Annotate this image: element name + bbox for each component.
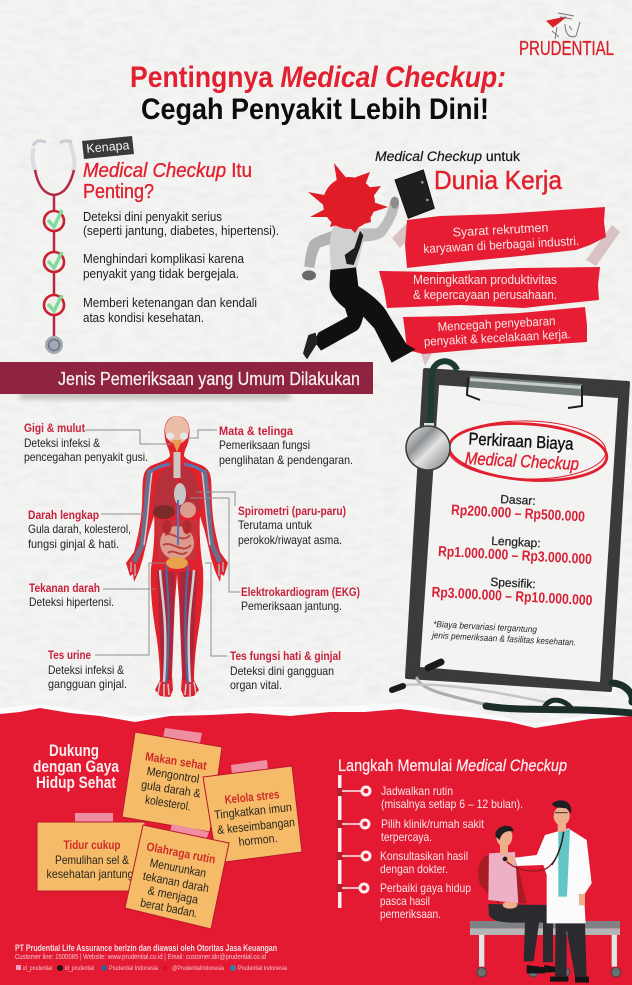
note: olahraga rutin: Menurunkan <box>149 856 207 880</box>
steps text: Jadwalkan rutin <box>381 784 453 798</box>
list text <box>83 210 279 325</box>
tape strips <box>392 222 620 366</box>
cost: spesifik <box>431 575 593 609</box>
note: makan sehat: Makan sehat <box>144 749 208 773</box>
footer <box>15 943 287 972</box>
social media row: @PrudentialIndonesia <box>172 965 224 972</box>
label: darah lengkap <box>28 508 131 551</box>
doctor <box>503 800 592 983</box>
title line 2: Cegah Penyakit Lebih Dini! <box>141 93 489 126</box>
company statement: PT Prudential Life Assurance berizin dan diawasi oleh Otoritas Jasa Keuangan <box>15 943 277 953</box>
cost: spesifik: Rp3.000.000 – Rp10.000.000 <box>431 585 593 609</box>
banner: jenis pemeriksaan: Jenis Pemeriksaan yang Umum Dilakukan <box>58 368 360 389</box>
red hand-drawn ellipse <box>447 419 609 485</box>
cost: dasar: Dasar: <box>500 492 536 508</box>
label: tes urine: Deteksi infeksi & <box>48 663 124 677</box>
spine vessels <box>177 500 179 545</box>
cost heading <box>465 429 580 474</box>
label: tes urine: gangguan ginjal. <box>48 677 127 691</box>
list text: atas kondisi kesehatan. <box>83 311 204 325</box>
kidneys <box>162 520 192 534</box>
note: kelola stres: Kelola stres <box>224 787 280 807</box>
running businessman <box>302 170 434 363</box>
label: tekanan darah: Tekanan darah <box>29 581 100 595</box>
ribbon 3: penyakit & kecelakaan kerja. <box>423 327 571 349</box>
label: spirometri <box>238 504 346 547</box>
label: darah lengkap: Darah lengkap <box>28 508 99 522</box>
steps text: Konsultasikan hasil <box>380 849 468 863</box>
cost: lengkap <box>438 534 592 568</box>
note: makan sehat <box>122 728 222 832</box>
lifestyle heading: Hidup Sehat <box>36 773 116 792</box>
note: tidur cukup: Pemulihan sel & <box>55 853 129 867</box>
note: makan sehat: kolesterol. <box>144 792 192 814</box>
anatomy labels <box>24 421 360 692</box>
label: mata & telinga: Pemeriksaan fungsi <box>219 438 310 452</box>
trousers <box>314 267 416 363</box>
note: tidur cukup: kesehatan jantung <box>46 867 134 881</box>
label: mata & telinga: Mata & telinga <box>219 424 293 438</box>
icon: stethoscope timeline <box>33 141 74 354</box>
list text: Menghindari komplikasi karena <box>83 252 244 266</box>
steps text: (misalnya setiap 6 – 12 bulan). <box>381 797 523 811</box>
social media row <box>16 965 287 972</box>
steps text: pemeriksaan. <box>380 907 441 921</box>
steps text <box>380 784 523 921</box>
ribbon 3 <box>403 307 587 354</box>
pelvis <box>166 557 188 569</box>
cost: lengkap: Lengkap: <box>491 534 541 550</box>
neck <box>174 452 180 478</box>
fist <box>302 270 316 280</box>
ribbon 1: Syarat rekrutmen <box>452 221 549 240</box>
note: kelola stres: hormon. <box>238 831 278 849</box>
heading large: Dunia Kerja <box>434 165 563 195</box>
panel: cost estimate clipboard <box>392 361 632 713</box>
steps text: pasca hasil <box>380 894 430 908</box>
label: tes urine <box>48 648 127 691</box>
anatomy human body <box>126 416 228 697</box>
logo: Prudential <box>519 13 614 60</box>
list text: Memberi ketenangan dan kendali <box>83 296 257 310</box>
label: gigi & mulut: Gigi & mulut <box>24 421 85 435</box>
label: elektrokardiogram: Pemeriksaan jantung. <box>241 599 342 613</box>
briefcase <box>395 170 434 218</box>
cost heading: Medical Checkup <box>465 448 580 474</box>
label: tekanan darah <box>29 581 114 609</box>
label: tes fungsi hati & ginjal: organ vital. <box>230 678 282 692</box>
lifestyle heading: Dukung <box>49 741 99 760</box>
note: olahraga rutin <box>125 824 229 929</box>
label: elektrokardiogram <box>241 585 360 613</box>
label: spirometri: perokok/riwayat asma. <box>238 533 342 547</box>
clipboard clip <box>467 376 582 410</box>
skull and face <box>165 416 189 452</box>
ribbon 1 <box>405 207 606 268</box>
cost: spesifik: Spesifik: <box>490 575 536 591</box>
note: tidur cukup <box>37 813 145 891</box>
note: olahraga rutin: Olahraga rutin <box>145 839 217 867</box>
list text: (seperti jantung, diabetes, hipertensi). <box>83 224 279 238</box>
note: olahraga rutin: tekanan darah <box>142 869 210 895</box>
tag: Kenapa <box>82 136 134 159</box>
note: kelola stres <box>203 760 302 863</box>
intestines <box>160 526 194 560</box>
clipboard paper <box>420 385 618 682</box>
lifestyle heading: dengan Gaya <box>33 757 119 776</box>
banner: jenis pemeriksaan <box>0 362 373 399</box>
label: tekanan darah: Deteksi hipertensi. <box>29 595 114 609</box>
clipboard board <box>407 370 628 690</box>
patient <box>478 826 558 973</box>
label: gigi & mulut <box>24 421 148 464</box>
note: olahraga rutin: & menjaga <box>147 883 200 907</box>
cost: lengkap: Rp1.000.000 – Rp3.000.000 <box>438 544 592 568</box>
label: spirometri: Terutama untuk <box>238 518 313 532</box>
connector lines <box>85 430 240 656</box>
label: gigi & mulut: pencegahan penyakit gusi. <box>24 450 148 464</box>
note: tidur cukup: Tidur cukup <box>64 838 120 852</box>
title <box>130 61 506 126</box>
steps timeline <box>337 775 370 908</box>
label: mata & telinga: penglihatan & pendengaran. <box>219 453 353 467</box>
social media row: Prudential Indonesia <box>238 965 287 972</box>
ribbon 3: Mencegah penyebaran <box>437 314 556 334</box>
stethoscope tube top <box>430 361 457 424</box>
tag: Kenapa: Kenapa <box>86 138 130 156</box>
heart <box>174 483 186 505</box>
ribbon 2: & kepercayaan perusahaan. <box>413 288 557 302</box>
arms and torso <box>304 202 399 269</box>
cost: dasar: Rp200.000 – Rp500.000 <box>451 503 585 525</box>
list text: penyakit yang tidak bergejala. <box>83 267 239 281</box>
label: mata & telinga <box>219 424 353 467</box>
panel: healthy lifestyle <box>33 728 302 929</box>
cost note: *Biaya bervariasi tergantung <box>433 619 537 634</box>
contact line: Customer line: 1500085 | Website: www.prudential.co.id | Email: customer.idn@prudential.co.id <box>15 954 266 961</box>
red starburst <box>308 163 388 233</box>
label: tes fungsi hati & ginjal <box>230 649 341 692</box>
note: kelola stres: Tingkatkan imun <box>213 800 293 822</box>
torn red footer panel <box>0 703 632 985</box>
ribbon 2: Meningkatkan produktivitas <box>413 273 557 287</box>
cost heading: Perkiraan Biaya <box>468 429 574 454</box>
lifestyle heading <box>33 741 119 792</box>
shoe <box>303 333 318 359</box>
ribbon 1: karyawan di berbagai industri. <box>423 234 580 256</box>
steps heading: Langkah Memulai Medical Checkup <box>338 756 567 775</box>
stethoscope tubes bottom <box>392 662 632 713</box>
label: gigi & mulut: Deteksi infeksi & <box>24 436 100 450</box>
note: kelola stres: & keseimbangan <box>216 815 296 837</box>
steps text: dengan dokter. <box>380 862 448 876</box>
social media row: Prudential Indonesia <box>109 965 158 972</box>
bed <box>470 921 621 977</box>
panel: medical checkup for the workplace <box>302 149 620 366</box>
title line 1: Pentingnya Medical Checkup: <box>130 61 506 94</box>
liver <box>153 505 175 519</box>
label: tes fungsi hati & ginjal: Tes fungsi hati & ginjal <box>230 649 341 663</box>
steps text: terpercaya. <box>381 830 432 844</box>
stomach <box>180 502 196 518</box>
label: darah lengkap: Gula darah, kolesterol, <box>28 522 131 536</box>
label: tes urine: Tes urine <box>48 648 91 662</box>
social media row: id_prudential <box>65 965 94 972</box>
label: elektrokardiogram: Elektrokardiogram (EKG) <box>241 585 360 599</box>
list text: Deteksi dini penyakit serius <box>83 210 222 224</box>
logo sketch <box>547 13 580 39</box>
heading: Penting? <box>83 181 154 203</box>
label: darah lengkap: fungsi ginjal & hati. <box>28 537 119 551</box>
note: olahraga rutin: berat badan. <box>139 896 199 920</box>
cost note: jenis pemeriksaan & fasilitas kesehatan. <box>431 630 576 648</box>
heading: Medical Checkup Itu <box>83 160 252 182</box>
stethoscope disc <box>406 423 450 470</box>
note: makan sehat: gula darah & <box>140 777 202 801</box>
social media row: id_prudential <box>23 965 52 972</box>
panel: steps to start <box>337 756 621 983</box>
ribbon 2 <box>379 267 600 308</box>
label: spirometri: Spirometri (paru-paru) <box>238 504 346 518</box>
illustration: doctor and patient <box>470 800 621 983</box>
label: tes fungsi hati & ginjal: Deteksi dini gangguan <box>230 664 334 678</box>
panel: why checkup matters <box>33 136 279 354</box>
steps text: Perbaiki gaya hidup <box>380 881 471 895</box>
tie <box>345 231 363 265</box>
heading small: Medical Checkup untuk <box>375 149 520 164</box>
heading <box>83 160 252 203</box>
steps text: Pilih klinik/rumah sakit <box>381 817 485 831</box>
note: makan sehat: Mengontrol <box>146 764 200 786</box>
hand on briefcase <box>390 197 399 209</box>
cost note <box>431 619 576 648</box>
cost: dasar <box>451 492 585 525</box>
